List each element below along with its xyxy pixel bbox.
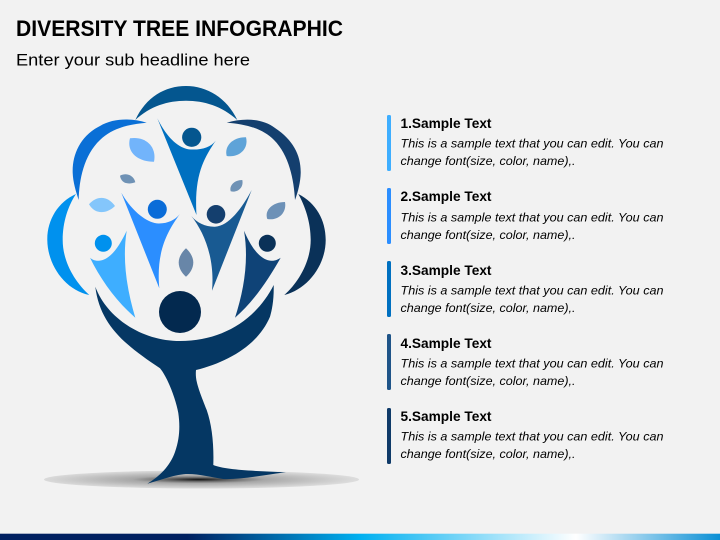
ground shadow — [44, 470, 359, 488]
description 3: This is a sample text that you can edit. You can — [400, 284, 664, 298]
main head — [159, 291, 201, 333]
accent bar 3 — [387, 261, 391, 317]
description 3: change font(size, color, name),. — [400, 301, 576, 315]
person 5 — [235, 231, 281, 318]
canopy arc: upper left — [73, 120, 147, 200]
accent bar 5 — [387, 408, 391, 464]
item 1 — [387, 115, 664, 171]
leaf 5 — [89, 198, 115, 212]
description 5: change font(size, color, name),. — [400, 447, 576, 461]
leaf 6 — [267, 202, 285, 219]
leaf 1 — [129, 138, 154, 162]
diversity tree illustration — [47, 86, 326, 484]
leaf 2 — [226, 137, 247, 156]
person 2 — [121, 193, 180, 288]
person 4 — [90, 231, 135, 318]
canopy arc: left — [47, 194, 89, 295]
item 2 — [387, 188, 664, 244]
title: DIVERSITY TREE INFOGRAPHIC — [16, 16, 343, 41]
item 4 — [387, 334, 664, 390]
description 4: change font(size, color, name),. — [400, 374, 576, 388]
canopy arc: top — [135, 86, 237, 120]
description 4: This is a sample text that you can edit. You can — [400, 357, 664, 371]
description 1: This is a sample text that you can edit. You can — [400, 137, 664, 151]
heading 5: 5.Sample Text — [400, 409, 492, 424]
description 5: This is a sample text that you can edit. You can — [400, 430, 664, 444]
canopy arc: upper right — [227, 120, 301, 200]
description 2: This is a sample text that you can edit. You can — [400, 211, 664, 225]
leaf 7 — [179, 248, 193, 277]
heading 1: 1.Sample Text — [400, 116, 492, 131]
person 3 — [191, 190, 252, 291]
description 2: change font(size, color, name),. — [400, 228, 576, 242]
heading 2: 2.Sample Text — [400, 189, 492, 204]
person 1 — [157, 118, 216, 215]
accent bar 2 — [387, 188, 391, 244]
item 5 — [387, 408, 664, 464]
item 3 — [387, 261, 664, 317]
heading 4: 4.Sample Text — [400, 336, 492, 351]
leaf 3 — [120, 174, 135, 183]
accent bar 1 — [387, 115, 391, 171]
description 1: change font(size, color, name),. — [400, 154, 576, 168]
canopy arc: right — [284, 194, 326, 295]
subtitle: Enter your sub headline here — [16, 50, 250, 70]
bottom gradient bar — [0, 534, 720, 540]
leaf 4 — [230, 180, 243, 192]
tree trunk and arms — [95, 285, 286, 484]
heading 3: 3.Sample Text — [400, 263, 492, 278]
accent bar 4 — [387, 334, 391, 390]
